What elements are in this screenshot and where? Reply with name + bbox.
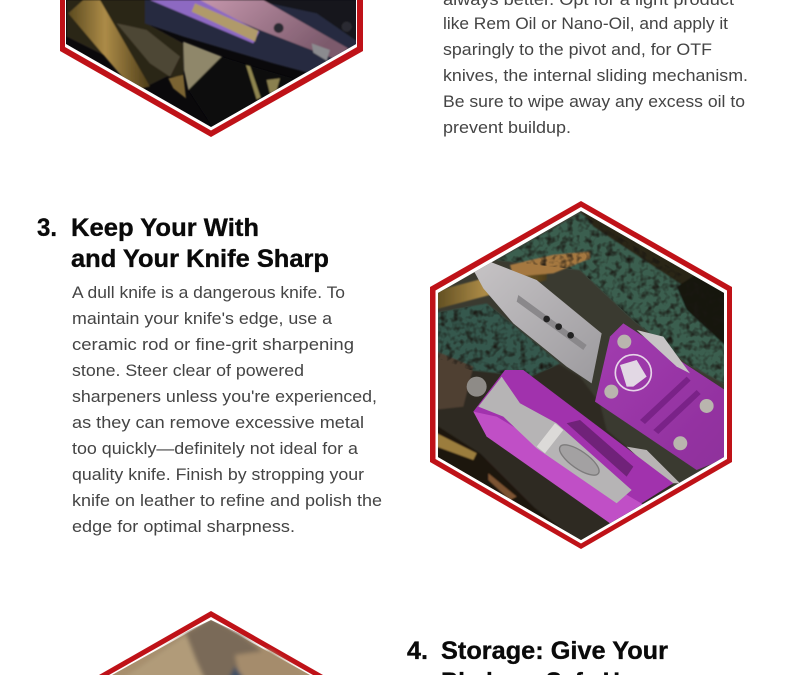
body text: step 3: too quickly—definitely not ideal for a [72,440,359,458]
body text: step 2 continuation: prevent buildup. [443,119,571,137]
heading: step 4: Storage: Give Your [441,637,668,665]
heading: step 4 [407,637,669,675]
handle and blade details [595,323,730,470]
image panel: knife on leather, hexagon cropped at top [60,0,363,147]
body text: step 3: sharpeners unless you're experienced, [72,388,377,406]
body text: step 3: knife on leather to refine and polish the [72,492,382,510]
body text: step 2 continuation: Be sure to wipe away any excess oil to [443,93,745,111]
heading: step 3 [37,214,329,273]
heading: step 3: 3. [37,214,57,242]
heading: step 4: 4. [407,637,428,665]
body text: step 3: edge for optimal sharpness. [72,518,295,536]
body text: step 3: quality knife. Finish by stropping your [72,466,365,484]
body text: step 3: ceramic rod or fine-grit sharpening [72,336,354,354]
heading: step 3: and Your Knife Sharp [71,245,329,273]
body text: step 3: A dull knife is a dangerous knife. To [72,284,345,302]
body text: step 2 continuation: sparingly to the pivot and, for OTF [443,41,712,59]
body text: step 2 continuation [443,0,748,137]
body text: step 3 [72,284,382,536]
image panel: purple knife hexagon [430,201,732,549]
heading: step 3: Keep Your With [71,214,259,242]
body text: step 3: maintain your knife's edge, use a [72,310,333,328]
body text: step 2 continuation: like Rem Oil or Nano-Oil, and apply it [443,15,728,33]
image panel: hexagon cropped at bottom [99,611,323,675]
body text: step 3: stone. Steer clear of powered [72,362,304,380]
body text: step 2 continuation: knives, the internal sliding mechanism. [443,67,748,85]
body text: step 3: as they can remove excessive metal [72,414,364,432]
